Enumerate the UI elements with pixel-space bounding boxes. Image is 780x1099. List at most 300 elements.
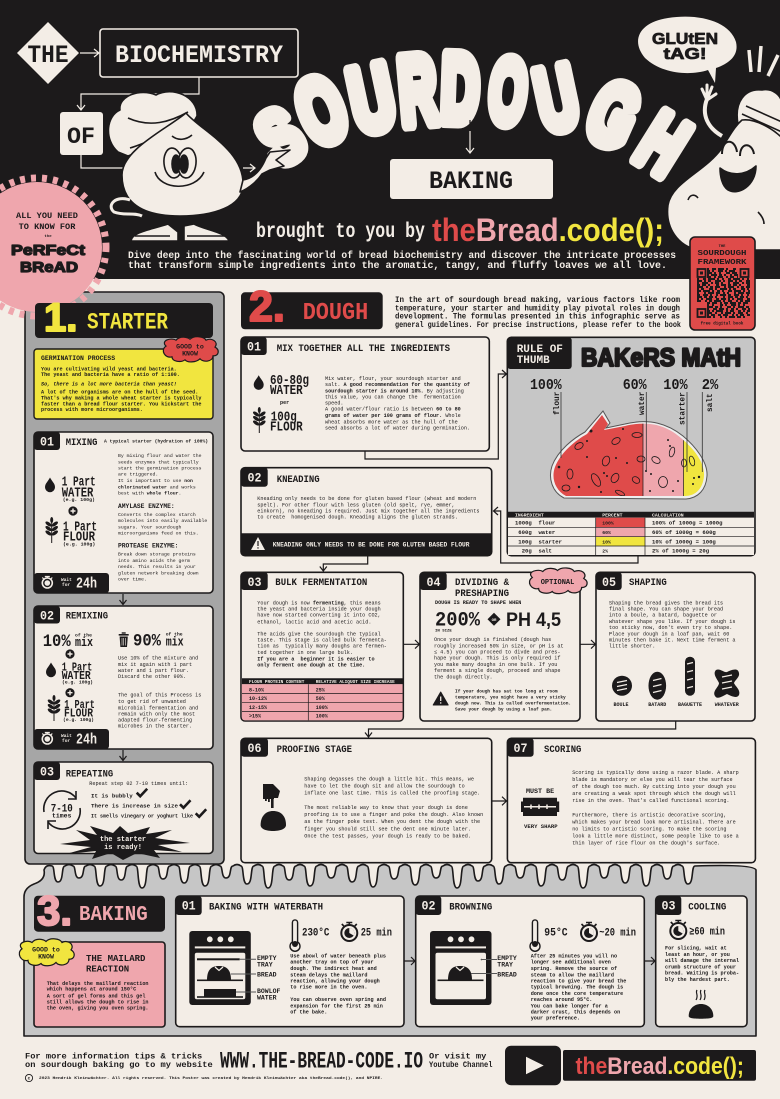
panel: baking 03 cooling: will damage the internal bbox=[665, 958, 739, 964]
title: the biochemistry of bbox=[17, 22, 298, 168]
panel: dough 04 dividing and preshaping: temperature, you might have a very sticky bbox=[455, 694, 566, 700]
title: SOURDOUGH bubble letters: H bbox=[622, 94, 704, 193]
panel: 02 remixing: adapted flour-fermenting bbox=[118, 718, 192, 724]
panel: 02 remixing: (e.g. 100g) bbox=[62, 680, 93, 686]
panel: 01 mixing: best with bbox=[118, 490, 147, 496]
intro text: Dive deep into the fascinating world of bread biochemistry and discover the intricate processes bbox=[128, 250, 676, 262]
icon: whatever shape bbox=[714, 669, 739, 698]
panel: section 1 starter background bbox=[25, 292, 224, 864]
panel: dough 02 kneading: KNEADING bbox=[277, 474, 320, 486]
panel: dough 04 dividing and preshaping: PH 4,5 bbox=[506, 610, 561, 631]
panel: dough 05 shaping: little shorter. bbox=[609, 644, 655, 650]
panel: baking 02 browning: typical browning. The dough is bbox=[531, 985, 623, 991]
panel: baking 01 waterbath: 01 bbox=[182, 900, 196, 914]
table: bakers math calculation: 10% bbox=[602, 539, 611, 545]
title: SOURDOUGH bubble letters: O bbox=[282, 56, 361, 165]
panel: dough 01 mix together: wheat absorbs more water as the hull of the bbox=[325, 419, 458, 425]
panel: dough 04 dividing and preshaping: ≤ 4.5) you can proceed to divde and pres- bbox=[434, 650, 560, 656]
panel: bakers math: BAKeRS MAtH bbox=[581, 344, 741, 372]
panel: dough 04 dividing and preshaping: DIVIDING & bbox=[455, 577, 510, 589]
panel: baking 02 browning: BROWNING bbox=[449, 902, 492, 914]
panel: dough 03 bulk fermentation: have now started converting it into CO2, bbox=[257, 613, 381, 619]
table: bakers math calculation: 20g salt bbox=[522, 548, 552, 555]
panel: dough 07 scoring: which makes your bread look more artisinal. There are bbox=[572, 819, 736, 825]
panel: dough 03 bulk fermentation: fermenting, this means bbox=[313, 600, 381, 606]
badge: optional bbox=[529, 568, 587, 594]
panel: dough 03 bulk fermentation: Your dough is now bbox=[257, 600, 313, 606]
panel: dough 04 dividing and preshaping: 200% bbox=[435, 610, 481, 633]
icon: youtube play button bbox=[505, 1046, 561, 1085]
panel: dough 07 scoring: Scoring is typically done using a razor blade. A sharp bbox=[572, 770, 739, 776]
title: SOURDOUGH bubble letters: O bbox=[484, 41, 532, 144]
brand line: brought to you by bbox=[256, 221, 425, 244]
panel: dough 03 bulk fermentation: 10-12% bbox=[249, 696, 267, 702]
BAKING box bbox=[390, 159, 553, 199]
panel: 01 mixing: (e.g. 100g) bbox=[63, 497, 95, 503]
brand line: theBread.code(); bbox=[432, 212, 664, 248]
heading: 3. baking: BAKING bbox=[79, 904, 148, 927]
panel: dough 01 mix together: 60-80g bbox=[270, 373, 309, 389]
panel: baking 01 waterbath: to rise more in the oven. bbox=[290, 985, 367, 991]
panel: dough 04 dividing and preshaping bbox=[420, 572, 580, 721]
illustration: happy chef dough bbox=[668, 46, 780, 250]
panel: germination process: The yeast and bacteria have a ratio of 1:100. bbox=[41, 372, 180, 378]
panel: dough 04 dividing and preshaping: the dough directly. bbox=[434, 674, 493, 680]
panel: baking 02 browning: TRAY bbox=[497, 962, 513, 969]
panel: baking 03 cooling: COOLING bbox=[688, 902, 726, 914]
badge: all you need to know: the bbox=[44, 234, 52, 239]
footer: website text bbox=[25, 1048, 492, 1076]
footer: website text: For more information tips & tricks bbox=[25, 1052, 202, 1062]
panel: germination process: That's why making a whole wheat starter is typically bbox=[41, 395, 201, 401]
arrow: remixing to repeating bbox=[120, 750, 126, 760]
panel: baking 02 browning: EMPTY bbox=[497, 955, 517, 962]
card: QR sourdough framework: free digital book bbox=[701, 322, 744, 326]
panel: 03 repeating: 03 bbox=[40, 766, 54, 780]
panel: dough 06 proofing stage: Once the test passes, your dough is ready to be baked. bbox=[304, 833, 471, 839]
panel: baking 02 browning: done once the core temperature bbox=[531, 991, 623, 997]
panel: germination process: You are cultivating wild yeast and bacteria. bbox=[41, 366, 177, 372]
panel: baking 02 browning bbox=[416, 896, 644, 1027]
panel: bakers math: salt bbox=[707, 393, 715, 412]
panel: 01 mixing: start the germination process bbox=[118, 466, 202, 472]
panel: dough 04 dividing and preshaping: dough now. This is called overfermentation. bbox=[455, 700, 571, 706]
panel: dough 01 mix together: WATER bbox=[270, 383, 303, 399]
panel: baking 01 waterbath: expansion for the first 25 min bbox=[290, 1003, 383, 1009]
table: bakers math calculation: INGREDIENT bbox=[515, 512, 544, 518]
panel: 03 repeating bbox=[34, 762, 213, 860]
panel: 01 mixing: seeds enzymes that typically bbox=[118, 459, 199, 465]
panel: baking 01 waterbath: steam delays the maillard bbox=[290, 972, 367, 978]
panel: dough 03 bulk fermentation: ted together in one large bulk. bbox=[257, 650, 353, 656]
arrow: mix to bakers math bbox=[365, 370, 506, 459]
panel: 02 remixing: water and 1 part flour. bbox=[118, 668, 189, 674]
panel: dough 01 mix together: FLOUR bbox=[270, 420, 303, 436]
panel: dough 05 shaping: into a boule, a batard, baguette or bbox=[609, 613, 717, 619]
panel: 02 remixing: (e.g. 100g) bbox=[63, 717, 94, 723]
panel: dough 01 mix together: Whole bbox=[442, 413, 461, 419]
title: SOURDOUGH bubble letters: S bbox=[242, 91, 319, 183]
heading: 2. dough: 2. bbox=[249, 283, 285, 331]
panel: 01 mixing: gluten network breaking down bbox=[118, 570, 199, 576]
table: bakers math calculation: 2% bbox=[602, 548, 608, 554]
panel: dough 06 proofing stage: 06 bbox=[248, 742, 262, 756]
table: bakers math calculation: 60% bbox=[602, 530, 611, 536]
badge: optional: OPTIONAL bbox=[541, 579, 574, 587]
panel: 02 remixing: mix bbox=[166, 636, 184, 650]
panel: 02 remixing: 24h bbox=[76, 731, 97, 748]
speech bubble: gluten tag: tAG! bbox=[664, 46, 706, 63]
panel: dough 03 bulk fermentation: tion as typically many doughs are fermen- bbox=[257, 644, 387, 650]
table: bakers math calculation: 1000g flour bbox=[515, 520, 555, 527]
BIOCHEMISTRY box bbox=[100, 29, 298, 77]
panel: dough 07 scoring: look a little more distinct, some people like to use a bbox=[572, 833, 739, 839]
panel: dough 07 scoring: of the dough too much. By cutting into your dough you bbox=[572, 784, 736, 790]
panel: dough 04 dividing and preshaping: you make many doughs in one bulk. If you bbox=[434, 662, 557, 668]
panel: dough 01 mix together: seed absorbs a lot of water during germination. bbox=[325, 425, 470, 431]
panel: 03 repeating: REPEATING bbox=[66, 768, 113, 780]
heading: 2. dough bbox=[241, 283, 383, 331]
speech bubble: gluten tag: GLUtEN bbox=[652, 31, 718, 48]
panel: baking 01 waterbath: EMPTY bbox=[257, 955, 277, 962]
panel: dough 01 mix together: grams of water per 100 grams of flour. bbox=[325, 413, 442, 419]
panel: the mailard reaction: the oven, giving you oven spring. bbox=[47, 1006, 149, 1012]
panel: 02 remixing: of the bbox=[75, 632, 92, 638]
heading: 3. baking bbox=[34, 887, 165, 934]
brand line bbox=[256, 212, 664, 248]
panel: section 3 baking background with drips bbox=[24, 864, 756, 1036]
panel: 01 mixing: By mixing flour and water the bbox=[118, 453, 202, 459]
panel: dough 03 bulk fermentation: 50% bbox=[316, 696, 325, 702]
panel: dough 06 proofing stage: The most reliable way to know that your dough is done bbox=[304, 805, 468, 811]
arrow: kneading to bulk fermentation bbox=[320, 556, 368, 571]
arrow: browning to cooling bbox=[644, 957, 655, 965]
panel: 01 mixing: 1 Part bbox=[62, 474, 96, 490]
panel: baking 01 waterbath: dough. The indirect heat and bbox=[290, 966, 377, 972]
panel: dough 05 shaping: BAGUETTE bbox=[678, 702, 702, 708]
panel: 01 mixing: microorganisms feed on this. bbox=[118, 531, 199, 537]
panel: dough 03 bulk fermentation: only ferment one dough at the time. bbox=[257, 663, 365, 669]
panel: 01 mixing: Break down storage proteins bbox=[118, 552, 196, 558]
text: dough intro: temperature, your starter and humidity play pivotal roles in dough bbox=[395, 305, 680, 313]
footer: website text: Or visit my bbox=[429, 1052, 487, 1062]
badge: good to know (red) bbox=[163, 337, 218, 362]
panel: 01 mixing: Wait bbox=[61, 577, 72, 583]
panel: baking 03 cooling: bread. Waiting is proba- bbox=[665, 971, 739, 977]
table: bakers math calculation: 600g water bbox=[518, 529, 555, 536]
panel: 01 mixing: A typical starter (hydration of 100%) bbox=[104, 439, 208, 445]
panel: dough 01 mix together: salt. bbox=[325, 382, 344, 388]
table: bakers math calculation: 100% bbox=[602, 520, 614, 526]
panel: dough 01 mix together: speed. bbox=[325, 401, 344, 407]
panel: dough 05 shaping: SHAPING bbox=[629, 577, 667, 589]
panel: 02 remixing: for bbox=[62, 738, 70, 744]
panel: dough 02 kneading: KNEADING ONLY NEEDS TO BE DONE FOR GLUTEN BASED FLOUR bbox=[273, 542, 470, 548]
title: SOURDOUGH bubble letters: R bbox=[395, 37, 441, 146]
panel: baking 02 browning: darker crust, this depends on bbox=[531, 1010, 620, 1016]
panel: baking 03 cooling bbox=[656, 896, 747, 1027]
panel: 02 remixing: remain with only the most bbox=[118, 712, 195, 718]
panel: 02 remixing: mix it again with 1 part bbox=[118, 662, 192, 668]
footer: copyright: c bbox=[28, 1076, 31, 1082]
panel: dough 06 proofing stage: PROOFING STAGE bbox=[277, 744, 352, 756]
illustration: chef dough pointing bbox=[108, 92, 290, 241]
panel: the mailard reaction bbox=[34, 942, 165, 1027]
heading: 1. starter bbox=[35, 296, 213, 340]
panel: 02 remixing: microbial fermentation and bbox=[118, 705, 198, 711]
panel: dough 04 dividing and preshaping: OR bbox=[492, 619, 497, 623]
panel: dough 04 dividing and preshaping: DOUGH IS READY TO SHAPE WHEN bbox=[435, 600, 521, 606]
panel: dough 07 scoring: VERY SHARP bbox=[524, 823, 558, 830]
panel: dough 06 proofing stage: inflate one last time. This is called the proofing stage. bbox=[304, 791, 480, 797]
arrow: bakers math to kneading bbox=[494, 507, 638, 563]
table: bakers math calculation: 2% of 1000g = 20g bbox=[652, 548, 710, 555]
panel: baking 02 browning: longer see additional oven bbox=[531, 960, 611, 966]
panel: baking 01 waterbath: of the bake. bbox=[290, 1010, 327, 1016]
footer logo: thebread.code: theBread.code(); bbox=[576, 1053, 744, 1080]
panel: dough 03 bulk fermentation: 03 bbox=[248, 576, 262, 590]
speech bubble: gluten tag bbox=[638, 17, 737, 83]
panel: dough 04 dividing and preshaping: 04 bbox=[426, 576, 441, 590]
footer: website text: on sourdough baking go to my website bbox=[25, 1060, 213, 1070]
panel: baking 02 browning: You can bake longer for a bbox=[531, 1003, 608, 1009]
intro text: that transform simple ingredients into the aromatic, tangy, and fluffy loaves we all love. bbox=[128, 260, 667, 272]
panel: 02 remixing: WATER bbox=[62, 669, 91, 683]
panel: 01 mixing: molecules into easily available bbox=[118, 518, 207, 524]
badge: good to know (yellow): GOOD to bbox=[32, 946, 60, 954]
panel: 01 mixing: sugars. Your sourdough bbox=[118, 524, 181, 530]
panel: 01 mixing: PROTEASE ENZYME: bbox=[118, 542, 178, 549]
title: SOURDOUGH bubble letters: G bbox=[573, 61, 654, 168]
panel: bakers math: flour bbox=[554, 391, 562, 415]
badge: good to know (red): KNOW bbox=[182, 350, 198, 358]
panel: 01 mixing bbox=[34, 432, 213, 593]
panel: 01 mixing: whole flour. bbox=[147, 491, 181, 496]
panel: baking 01 waterbath: BOWLOF bbox=[257, 988, 281, 995]
panel: dough 05 shaping: minutes then bake it. Next time ferment a bbox=[609, 638, 735, 644]
panel: baking 03 cooling: For slicing, wait at bbox=[665, 946, 727, 952]
panel: 03 repeating: 7-10 bbox=[51, 804, 73, 816]
table: bakers math calculation: 100g starter bbox=[518, 539, 562, 546]
panel: bakers math: 2% bbox=[702, 378, 719, 394]
badge: good to know (yellow) bbox=[19, 939, 74, 966]
panel: 02 remixing: to get rid of unwanted bbox=[118, 699, 186, 705]
panel: 01 mixing: non bbox=[184, 479, 193, 484]
panel: dough 07 scoring: no limits to artistic scoring. To make the scoring bbox=[572, 826, 726, 832]
panel: baking 01 waterbath bbox=[176, 896, 404, 1027]
arrow: waterbath to browning bbox=[404, 957, 415, 965]
panel: baking 02 browning: steam to allow the maillard bbox=[531, 972, 614, 978]
panel: baking 01 waterbath: Use abowl of water beneath plus bbox=[290, 954, 386, 960]
table: bakers math calculation: CALCULATION bbox=[652, 512, 684, 518]
panel: 01 mixing: (e.g. 100g) bbox=[63, 541, 95, 547]
panel: dough 01 mix together: MIX TOGETHER ALL THE INGREDIENTS bbox=[277, 343, 450, 355]
panel: dough 03 bulk fermentation: taste. This stage is called bulk fermenta- bbox=[257, 638, 387, 644]
icon: steam bbox=[696, 990, 705, 1000]
panel: bakers math: 10% bbox=[663, 378, 688, 394]
panel: dough 01 mix together: per bbox=[280, 400, 289, 406]
panel: the mailard reaction: That delays the maillard reaction bbox=[47, 981, 149, 987]
intro text bbox=[128, 250, 676, 272]
arrow: bulk to dividing bbox=[404, 640, 420, 649]
panel: dough 01 mix together bbox=[241, 337, 489, 451]
panel: baking 03 cooling: 03 bbox=[662, 900, 676, 914]
table: bakers math calculation bbox=[508, 512, 754, 555]
chart: bread with percent sections bbox=[550, 410, 708, 500]
panel: baking 02 browning: ~20 min bbox=[599, 928, 636, 940]
panel: 03 repeating: It is bubbly bbox=[91, 792, 133, 799]
panel: the mailard reaction: REACTION bbox=[86, 964, 129, 974]
panel: dough 01 mix together: Mix water, flour, your sourdough starter and bbox=[325, 376, 461, 382]
panel: 03 repeating: Repeat step 02 7-10 times until: bbox=[89, 781, 188, 787]
panel: dough 03 bulk fermentation: the yeast and bacteria inside your dough bbox=[257, 606, 381, 612]
title: SOURDOUGH bubble letters: U bbox=[341, 46, 403, 153]
arrow: mixing to remixing bbox=[120, 594, 126, 604]
panel: dough 05 shaping: BATARD bbox=[648, 702, 666, 708]
panel: 02 remixing: Wait bbox=[61, 733, 72, 739]
panel: dough 06 proofing stage: finger you should still see the dent one minute later. bbox=[304, 826, 471, 832]
panel: dough 07 scoring: rise in the oven. That's called functional scoring. bbox=[572, 798, 730, 804]
badge: all you need to know: BReAD bbox=[20, 259, 78, 276]
panel: 01 mixing: needs. This results in your bbox=[118, 564, 196, 570]
panel: dough 02 kneading: to create homogenised dough. Kneading aligns the gluten strands. bbox=[257, 515, 458, 521]
badge: all you need to know: PeRFeCt bbox=[11, 242, 85, 259]
arrow: the to biochemistry bbox=[80, 49, 99, 57]
heading: 1. starter: 1. bbox=[44, 296, 77, 340]
panel: bakers math bbox=[507, 337, 755, 556]
panel: dough 03 bulk fermentation: 8-10% bbox=[249, 687, 264, 693]
panel: dough 05 shaping: BOULE bbox=[613, 702, 629, 708]
panel: 02 remixing: mix bbox=[75, 636, 93, 650]
panel: 01 mixing: FLOUR bbox=[63, 530, 95, 546]
card: QR sourdough framework: SOURDOUGH bbox=[698, 250, 746, 258]
badge: good to know (yellow): KNOW bbox=[38, 954, 54, 960]
panel: germination process: A lot of the organisms are on the hull of the seed. bbox=[41, 390, 198, 396]
panel: dough 06 proofing stage: as the finger poke test. When you dent the dough with the bbox=[304, 819, 480, 825]
panel: dough 07 scoring: are creating a weak spot through which the dough will bbox=[572, 791, 736, 797]
panel: dough 07 scoring: SCORING bbox=[544, 744, 581, 756]
arrow: shaping to proofing bbox=[365, 721, 676, 737]
text: dough intro: development. The formulas presented in this infographic serve as bbox=[395, 314, 680, 322]
panel: bakers math: RULE OF bbox=[517, 344, 563, 356]
panel: baking 01 waterbath: BAKING WITH WATERBATH bbox=[209, 902, 323, 914]
panel: dough 01 mix together: A good water/flour ratio is between bbox=[325, 407, 436, 413]
panel: dough 03 bulk fermentation: FLOUR PROTEIN CONTENT bbox=[249, 680, 305, 685]
footer: website text: WWW.THE-BREAD-CODE.IO bbox=[220, 1048, 423, 1076]
panel: 01 mixing: into amino acids the germ bbox=[118, 558, 190, 564]
panel: 01 mixing: AMYLASE ENZYME: bbox=[118, 503, 175, 510]
panel: 02 remixing: microbes in the starter. bbox=[118, 724, 192, 730]
title: SOURDOUGH bubble letters: D bbox=[439, 36, 481, 143]
panel: 01 mixing: over time. bbox=[118, 577, 147, 583]
panel: bakers math: water bbox=[639, 391, 647, 415]
panel: dough 06 proofing stage: proofing is to use a finger and poke the dough. Also known bbox=[304, 812, 483, 818]
connector to OF bbox=[77, 77, 199, 110]
panel: 01 mixing: 24h bbox=[76, 575, 97, 592]
panel: dough 02 kneading: 02 bbox=[248, 472, 262, 486]
panel: dough 01 mix together: sourdough starter is around 10%. bbox=[325, 388, 424, 394]
panel: dough 07 scoring: blade is mandatory or else you will tear the surface bbox=[572, 777, 733, 783]
panel: dough 05 shaping: WHATEVER bbox=[715, 702, 739, 708]
BIOCHEMISTRY box: BIOCHEMISTRY bbox=[115, 41, 283, 70]
panel: baking 01 waterbath: 25 min bbox=[361, 928, 392, 940]
footer: copyright: 2023 Hendrik Kleinwächter. All rights reserved. This Poster was created by Hendrik Kleinwächter aka theBread.code(), and NPIRE. bbox=[39, 1076, 383, 1081]
panel: 01 mixing: 01 bbox=[40, 436, 54, 450]
panel: bakers math: starter bbox=[680, 392, 688, 425]
panel: 01 mixing: are triggered. bbox=[118, 472, 158, 478]
panel: dough 07 scoring: Furthermore, there is artistic decorative scoring, bbox=[572, 812, 726, 818]
panel: dough 04 dividing and preshaping: Save your dough by using a loaf pan. bbox=[455, 706, 552, 712]
panel: dough 01 mix together: By adjusting bbox=[424, 388, 464, 394]
panel: 02 remixing: 90% bbox=[133, 632, 161, 652]
icon: dough bbox=[261, 811, 286, 831]
footer: website text: Youtube Channel bbox=[429, 1060, 492, 1070]
card: QR sourdough framework: THE bbox=[719, 245, 726, 249]
panel: dough 03 bulk fermentation bbox=[241, 572, 403, 721]
panel: 03 repeating: There is increase in size bbox=[91, 802, 178, 809]
THE diamond: THE bbox=[28, 41, 68, 70]
arrow: dividing to shaping bbox=[580, 640, 596, 649]
panel: germination process: faster than a bread flour starter. You kickstart the bbox=[41, 401, 201, 407]
panel: dough 07 scoring: thin layer of rice flour on the dough's surface. bbox=[572, 841, 720, 847]
panel: bakers math: 100% bbox=[530, 378, 562, 394]
panel: germination process bbox=[34, 349, 213, 419]
panel: dough 01 mix together: this value, you can change the fermentation bbox=[325, 394, 461, 400]
panel: dough 04 dividing and preshaping: IN SIZE bbox=[435, 630, 452, 634]
panel: 03 repeating: times bbox=[52, 813, 72, 820]
icon: finger poke bbox=[263, 784, 280, 808]
badge: all you need to know bbox=[0, 178, 106, 316]
panel: baking 02 browning: 02 bbox=[422, 900, 436, 914]
panel: dough 05 shaping bbox=[596, 572, 755, 721]
panel: the mailard reaction: THE MAILARD bbox=[86, 954, 146, 964]
card: QR sourdough framework: FRAMEWORK bbox=[698, 259, 747, 267]
heading: 1. starter: STARTER bbox=[87, 310, 168, 336]
panel: dough 04 dividing and preshaping: roughly increased 50% in size, or pH is at bbox=[434, 643, 564, 649]
OF box bbox=[60, 112, 103, 155]
table: bakers math calculation: 60% of 1000g = 600g bbox=[652, 529, 716, 536]
panel: 01 mixing: Converts the complex starch bbox=[118, 512, 196, 518]
panel: baking 03 cooling: crumb structure of your bbox=[665, 964, 736, 970]
card: QR sourdough framework bbox=[690, 237, 755, 330]
panel: dough 03 bulk fermentation: RELATIVE ALIQUOT SIZE INCREASE bbox=[316, 680, 395, 685]
icon: cooling loaf bbox=[689, 1004, 713, 1019]
panel: dough 03 bulk fermentation: BULK FERMENTATION bbox=[275, 577, 367, 589]
panel: 02 remixing: REMIXING bbox=[66, 610, 108, 622]
panel: 01 mixing: and works bbox=[167, 484, 196, 490]
icon: oven with bread and bowl bbox=[189, 931, 256, 1005]
panel: dough 04 dividing and preshaping: hape your dough. This is only required if bbox=[434, 656, 560, 662]
panel: 01 mixing: chlorinated water bbox=[118, 484, 167, 490]
table: bakers math calculation: 100% of 1000g = 1000g bbox=[652, 520, 723, 527]
panel: dough 06 proofing stage: have to let the dough sit and allow the sourdough to bbox=[304, 784, 465, 790]
panel: baking 02 browning: BREAD bbox=[497, 972, 517, 979]
panel: 01 mixing: MIXING bbox=[66, 437, 97, 449]
panel: dough 02 kneading bbox=[241, 468, 492, 556]
icon: razor blade bbox=[521, 798, 559, 816]
panel: baking 01 waterbath: TRAY bbox=[257, 962, 273, 969]
panel: dough 04 dividing and preshaping: Once your dough is finished (dough has bbox=[434, 637, 551, 643]
heading: 3. baking: 3. bbox=[37, 887, 72, 934]
panel: dough 05 shaping: too sticky now, don't even try to shape. bbox=[609, 625, 732, 631]
panel: dough 04 dividing and preshaping: If your dough has sat too long at room bbox=[455, 688, 558, 694]
panel: baking 02 browning: spring. Remove the source of bbox=[531, 966, 617, 972]
panel: dough 01 mix together: 01 bbox=[247, 340, 261, 354]
panel: baking 01 waterbath: reaction, allowing your dough bbox=[290, 978, 380, 984]
panel: 03 repeating: is ready! bbox=[104, 844, 142, 852]
heading: 2. dough: DOUGH bbox=[303, 300, 368, 327]
panel: 02 remixing: FLOUR bbox=[64, 706, 94, 720]
